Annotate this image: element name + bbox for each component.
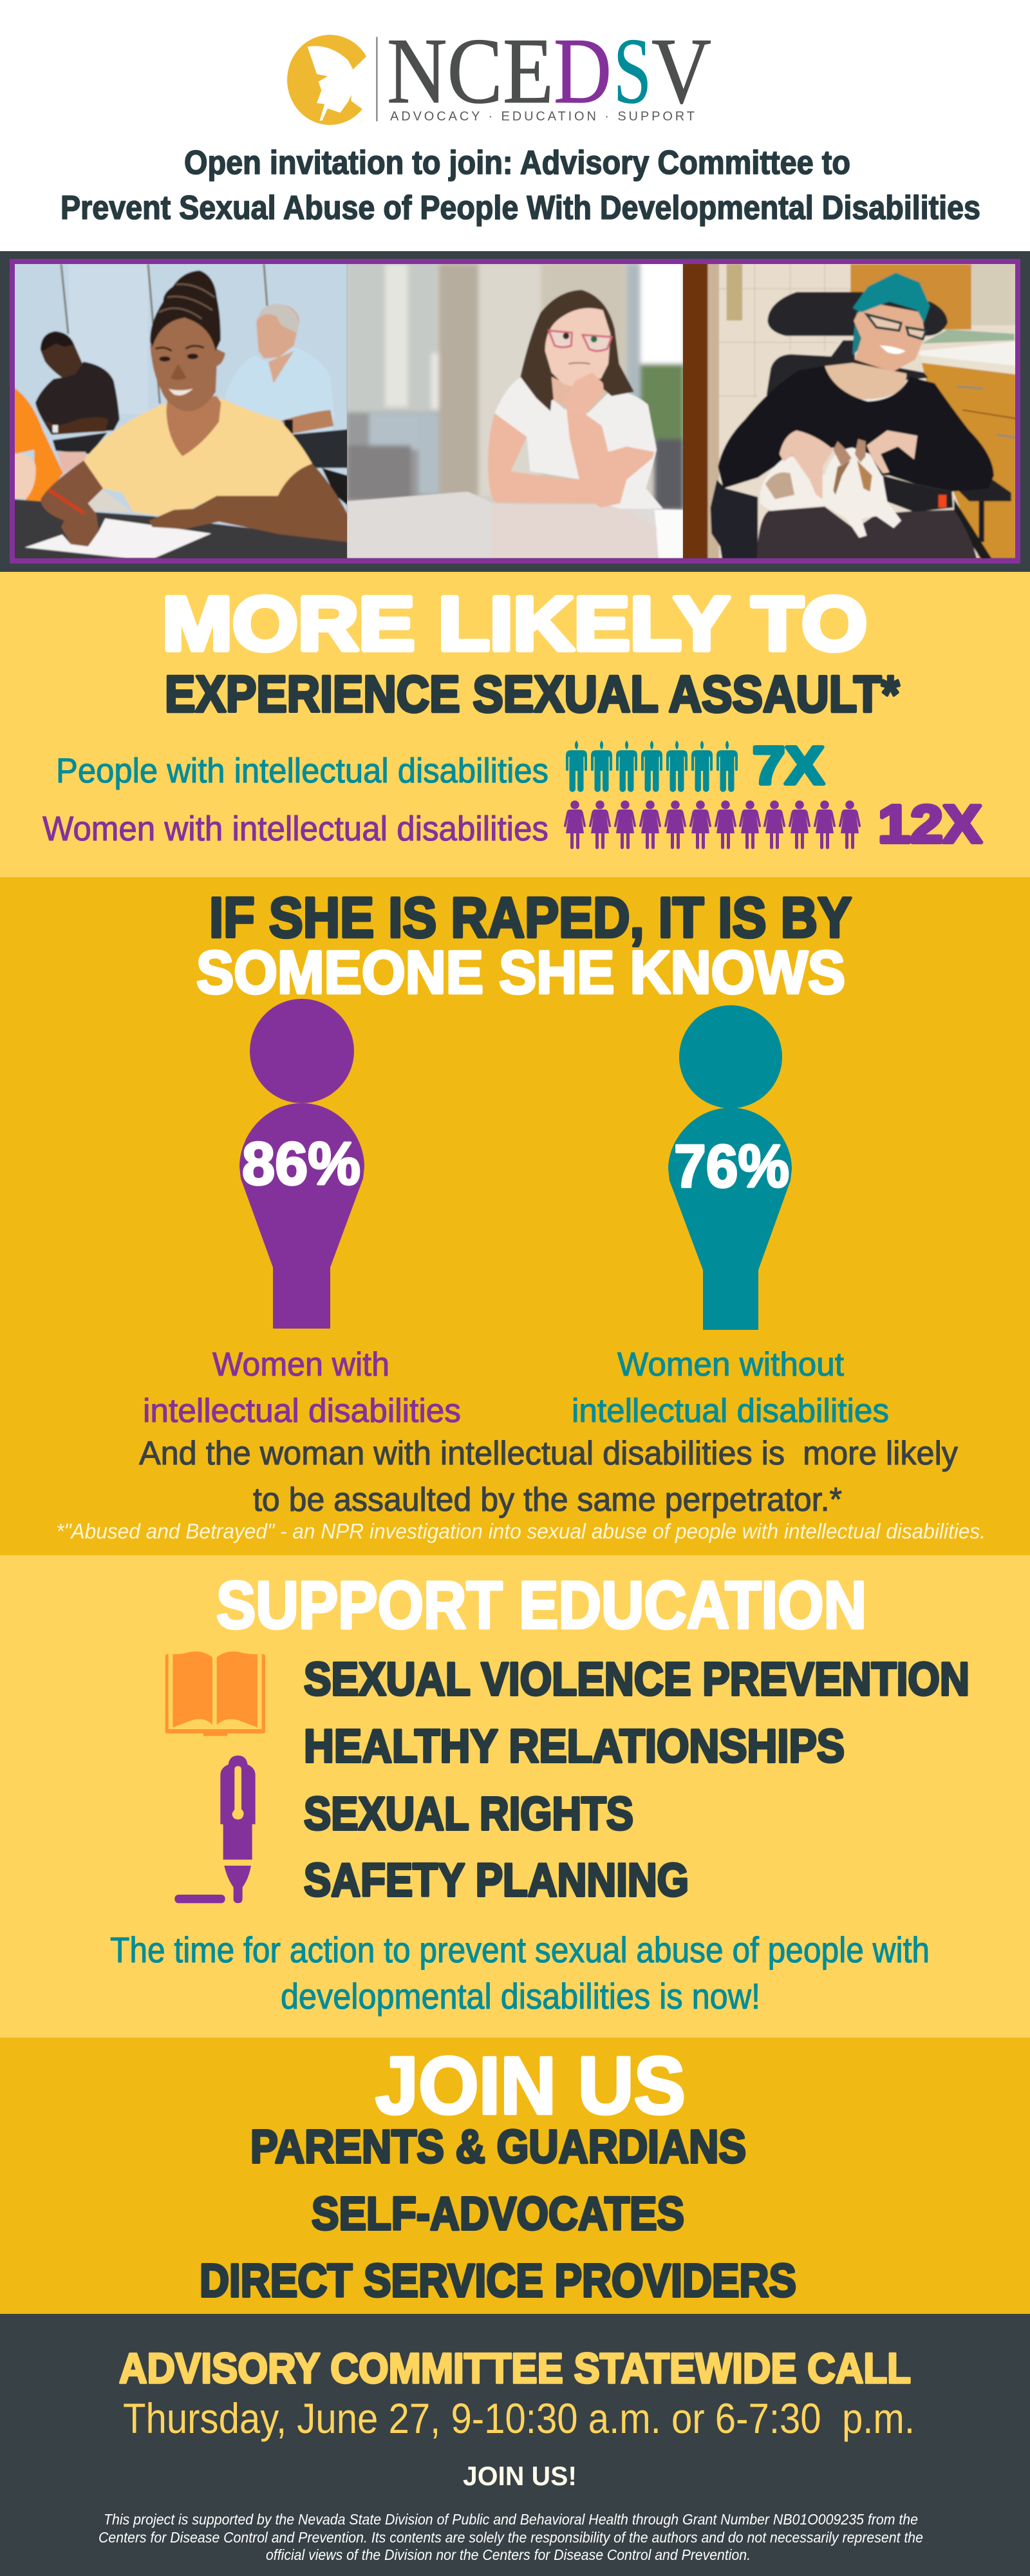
foreground table [13, 499, 348, 560]
title [61, 144, 980, 227]
footer: funding disclaimer: official views of the Division nor the Centers for Disease Control and Prevention. [266, 2546, 751, 2563]
tables [53, 433, 108, 454]
chair back [767, 340, 928, 395]
woman shirt [84, 398, 312, 516]
figure: 86 percent women with disabilities: 86% [242, 1130, 360, 1197]
text: time for action: developmental disabilities is now! [281, 1976, 760, 2016]
title: Open invitation to join: Advisory Committee to [184, 144, 850, 182]
chest [825, 363, 906, 401]
list: education topics [304, 1654, 969, 1906]
stat row: people 7X: People with intellectual disabilities [56, 752, 548, 790]
label: women with: intellectual disabilities [143, 1392, 461, 1430]
label: women without: intellectual disabilities [572, 1392, 889, 1430]
headrest [767, 292, 948, 336]
icon: open book [165, 1651, 265, 1736]
figure: 76 percent women without disabilities: 76% [674, 1132, 789, 1200]
icon: pen [174, 1756, 256, 1903]
heading: support education: SUPPORT EDUCATION [216, 1568, 866, 1643]
woman arms [41, 460, 103, 546]
logo tagline: ADVOCACY · EDUCATION · SUPPORT [390, 109, 695, 124]
logo wordmark: D [554, 19, 612, 123]
photo: woman with glasses at white table [346, 261, 684, 560]
heading: statewide call: ADVISORY COMMITTEE STATEWIDE CALL [119, 2344, 911, 2392]
text: same perpetrator statement: And the woman with intellectual disabilities is more likely [139, 1435, 958, 1472]
logo: NCEDSV [287, 19, 711, 125]
label: women with: Women with [212, 1346, 389, 1383]
photo: woman at classroom table [13, 261, 348, 560]
text: same perpetrator statement [139, 1435, 958, 1519]
rabbit [760, 448, 901, 538]
stat row: people 7X [56, 735, 824, 795]
heading: if she is raped: IF SHE IS RAPED, IT IS BY [209, 886, 852, 949]
face [545, 308, 610, 388]
arms [488, 409, 655, 507]
text: join us call to action: JOIN US! [463, 2461, 577, 2491]
text: time for action: The time for action to prevent sexual abuse of people with [110, 1929, 930, 1970]
logo wordmark: NCE [387, 19, 554, 123]
hair [520, 290, 634, 411]
figure: 86 percent women with disabilities [239, 999, 364, 1329]
table [346, 491, 684, 560]
stat row: women 12X [42, 794, 982, 854]
footer: funding disclaimer [98, 2511, 923, 2563]
figure: 76 percent women without disabilities [668, 1005, 792, 1330]
photo: woman in wheelchair with rabbit [682, 261, 1020, 560]
number: 7X: 7X [753, 735, 824, 795]
icon row: twelve women [564, 800, 861, 849]
list: education topics: HEALTHY RELATIONSHIPS [304, 1721, 845, 1772]
black top [718, 366, 994, 491]
icon row: seven people [566, 741, 738, 792]
footer: funding disclaimer: Centers for Disease Control and Prevention. Its contents are solely the responsibility of the authors and do not necessarily represent the [98, 2529, 923, 2546]
woman head [150, 317, 225, 412]
list: who should join: DIRECT SERVICE PROVIDERS [200, 2255, 796, 2307]
heading: if she is raped: SOMEONE SHE KNOWS [196, 938, 845, 1006]
footnote: source: *"Abused and Betrayed" - an NPR investigation into sexual abuse of people with intellectual disabilities. [56, 1519, 986, 1543]
back-right man [224, 346, 334, 433]
heading: more likely to: MORE LIKELY TO [162, 582, 867, 667]
number: 12X: 12X [878, 794, 982, 854]
label: women without: Women without [617, 1346, 845, 1383]
belt [883, 475, 953, 512]
glasses [549, 330, 612, 351]
heading: join us: JOIN US [375, 2040, 686, 2131]
list: education topics: SAFETY PLANNING [304, 1855, 689, 1906]
orange person [14, 388, 63, 501]
icon: butterfly in yellow oval [287, 35, 389, 125]
panel: photo strip [12, 261, 1020, 561]
back-left man [35, 362, 120, 435]
hands [780, 430, 833, 499]
pants [757, 507, 977, 560]
logo wordmark: V [651, 19, 711, 123]
chair and floor [57, 452, 86, 473]
logo wordmark: S [613, 19, 651, 123]
woman shirt [494, 377, 663, 509]
logo wordmark [387, 19, 711, 123]
heading: experience sexual assault: EXPERIENCE SEXUAL ASSAULT* [165, 665, 900, 723]
heading: if she is raped [196, 886, 852, 1006]
armrest and post [956, 480, 1011, 501]
purple frame [12, 261, 1018, 561]
head [852, 309, 863, 355]
text: time for action [110, 1929, 930, 2016]
wheelchair controller [711, 480, 758, 560]
stat row: women 12X: Women with intellectual disabilities [42, 810, 548, 848]
text: date and time: Thursday, June 27, 9-10:30 a.m. or 6-7:30 p.m. [123, 2394, 915, 2442]
list: education topics: SEXUAL RIGHTS [304, 1788, 633, 1840]
footer: funding disclaimer: This project is supported by the Nevada State Division of Public and Behavioral Health through Grant Number NB01O009235 from the [104, 2511, 918, 2528]
list: who should join: SELF-ADVOCATES [312, 2188, 684, 2240]
label: women without [572, 1346, 889, 1430]
hand [565, 372, 604, 414]
list: who should join [200, 2121, 796, 2307]
label: women with [143, 1346, 461, 1430]
neck [550, 376, 573, 406]
text: same perpetrator statement: to be assaulted by the same perpetrator.* [253, 1481, 842, 1519]
list: who should join: PARENTS & GUARDIANS [250, 2121, 746, 2173]
